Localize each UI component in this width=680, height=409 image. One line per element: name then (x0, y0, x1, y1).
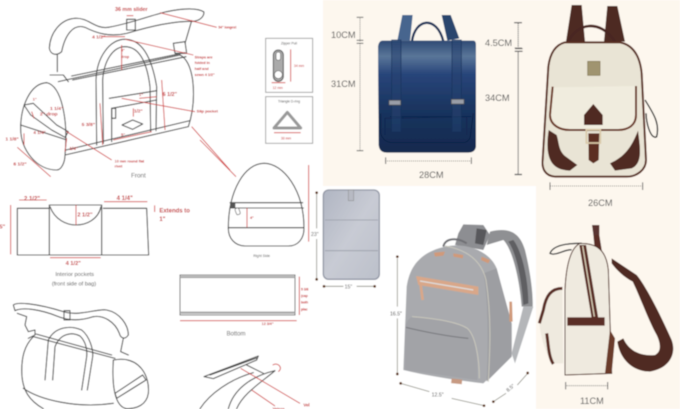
dimension lines (397, 258, 528, 406)
back strap (612, 258, 673, 372)
red labels: 1" (139, 92, 143, 97)
buckle strap (584, 104, 603, 125)
front pocket (539, 288, 563, 363)
slip pocket (109, 91, 157, 142)
body (565, 243, 612, 375)
navy backpack labels: 34CM (485, 93, 510, 103)
diagram: velcro detail: Vel (303, 403, 310, 408)
photo: grey diaper backpack with dimensions: 8.5" (505, 383, 516, 394)
red labels: 6 1/2" (163, 92, 178, 98)
navy backpack labels: 10CM (331, 30, 356, 40)
navy backpack labels: 28CM (419, 170, 444, 180)
red labels: half and (195, 67, 209, 71)
pocket (551, 86, 637, 130)
dimension lines (518, 23, 643, 186)
panel: triangle D-ring: 30 mm (281, 136, 291, 140)
side loop (645, 100, 658, 137)
diagram: right side view (200, 140, 309, 258)
diagram: bottom view: plac (301, 307, 308, 311)
bag body (21, 55, 193, 170)
red labels (5, 7, 237, 168)
labels: 4 1/2" (66, 261, 81, 267)
shoulder strap (49, 9, 204, 54)
diagram: bottom view: 12 3/4" (262, 322, 274, 326)
red labels: rivet (115, 164, 123, 168)
diagram: right side view: 4" (250, 216, 254, 220)
diagram: bottom view: both (301, 301, 308, 305)
logo diamond (122, 120, 143, 129)
panel: zipper pull: Zipper Pull (281, 41, 297, 45)
red labels: 1" (33, 97, 37, 102)
label: 11CM: 11CM (580, 396, 604, 406)
diagram: velcro detail (200, 356, 310, 409)
red labels: 1 1/4" (50, 106, 64, 112)
red labels: folded in (195, 61, 210, 65)
photo: cream backpack side view (539, 225, 673, 389)
panel: triangle D-ring: Triangle D-ring (278, 100, 300, 104)
carry handle (96, 39, 157, 145)
panel: cream background, leather backpacks (323, 0, 680, 409)
tan trims (416, 276, 478, 295)
photo: changing mat with dimensions: 15" (345, 285, 352, 291)
body (403, 245, 512, 383)
navy backpack labels: 31CM (331, 79, 356, 89)
red labels: 1/2" (134, 109, 143, 114)
red arrows (17, 13, 230, 177)
red labels: 54" longest (218, 25, 237, 29)
red labels: 6 1/2" (13, 162, 27, 168)
panel: triangle D-ring (266, 97, 313, 143)
panel: zipper pull: 34 mm (294, 64, 304, 68)
buckle straps (392, 40, 401, 132)
caption: Front (131, 172, 146, 179)
navy backpack labels: 4.5CM (485, 38, 512, 48)
diagram: interior pockets: (front side of bag) (52, 281, 96, 287)
photo: grey diaper backpack with dimensions (390, 224, 533, 407)
diagram: bottom view: Bottom (227, 331, 245, 337)
red labels: Slip pocket (197, 109, 219, 114)
navy backpack labels (331, 30, 512, 180)
labels: 2 1/2" (24, 196, 40, 202)
photo: changing mat with dimensions (311, 190, 379, 291)
red labels: 1/4" (69, 146, 78, 151)
diagram: duffel bag back view (13, 303, 149, 409)
side handle (24, 103, 68, 137)
labels: 2 1/2" (77, 213, 93, 219)
body (378, 41, 476, 153)
shoulder strap and back (487, 230, 533, 307)
red labels: 4" (121, 49, 125, 53)
labels: Extends to (159, 209, 190, 215)
slider (127, 19, 135, 30)
straps (566, 5, 625, 42)
zipper (72, 53, 186, 80)
labels: 1" (159, 217, 166, 223)
badge (588, 61, 600, 75)
red labels: 2" drop (40, 112, 58, 118)
diagram: bottom view: (cap (301, 294, 308, 298)
top handle and loop (592, 225, 599, 235)
diagram: right side view: Right Side (253, 254, 270, 258)
front pocket (405, 317, 478, 380)
red labels: 1 1/8" (5, 137, 19, 143)
red labels: drop (121, 55, 130, 59)
panel: zipper pull: 12 mm (273, 86, 283, 90)
red labels: 10 mm round flat (115, 159, 145, 163)
label: 26CM: 26CM (588, 198, 613, 208)
straps (397, 15, 413, 41)
panel: zipper pull (266, 38, 313, 92)
diagram: interior pockets (0, 196, 190, 287)
photo: changing mat with dimensions: 23" (311, 232, 319, 238)
diagram: bottom view (180, 275, 309, 337)
red labels: sewn 4 1/2" (195, 73, 215, 77)
labels: 4 1/4" (117, 196, 133, 202)
handle (443, 239, 467, 247)
red labels: 4 1/4" (33, 130, 46, 135)
red labels: Straps are (195, 56, 213, 60)
labels (0, 196, 190, 267)
diagram: bottom view: 5 3/8 (301, 287, 309, 291)
diagram: duffel bag front view with measurements (5, 7, 237, 179)
dimension line (567, 384, 607, 387)
red labels: 5" (121, 132, 125, 137)
red labels: 36 mm slider (115, 7, 148, 13)
photo: grey diaper backpack with dimensions: 12.5" (432, 393, 444, 399)
photo: cream backpack (514, 5, 658, 190)
body (22, 334, 149, 409)
photo: navy backpack with dimensions (357, 15, 522, 174)
diagram: interior pockets: Interior pockets (55, 272, 94, 278)
photo: grey diaper backpack with dimensions: 16.5" (390, 311, 402, 317)
body (542, 42, 646, 177)
red labels: 5 3/8" (82, 122, 96, 128)
dimension lines (360, 18, 518, 174)
corners (547, 130, 577, 171)
red labels: 4 1/2" (92, 34, 106, 40)
